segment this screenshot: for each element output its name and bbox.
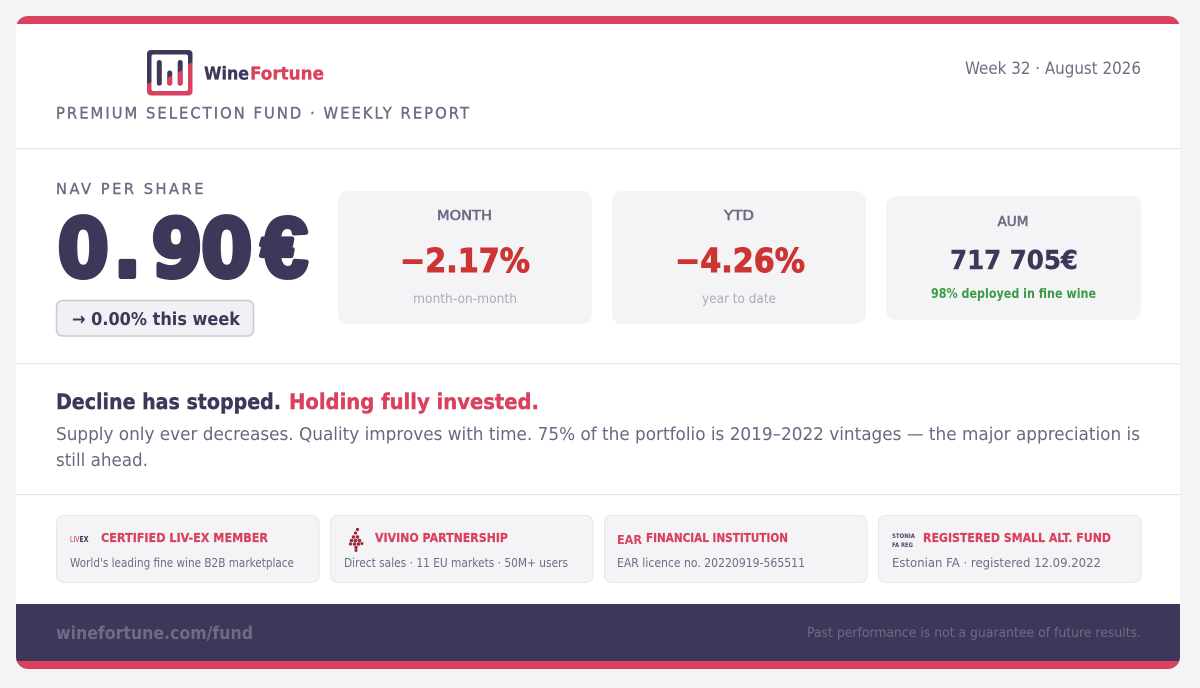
logo wordmark: Fortune (250, 64, 324, 84)
badge: Estonian FA (878, 516, 1141, 582)
badge: Liv-ex: World's leading fine wine B2B marketplace (70, 555, 294, 570)
panel: month KPI: MONTH (437, 208, 492, 224)
weekly change pill (56, 300, 254, 336)
panel: YTD KPI: year to date (702, 292, 776, 307)
badge: Liv-ex: CERTIFIED LIV-EX MEMBER (101, 530, 268, 545)
subtitle: PREMIUM SELECTION FUND · WEEKLY REPORT (56, 104, 471, 123)
badge: Vivino: Direct sales · 11 EU markets · 50M+ users (344, 555, 568, 570)
NAV label: NAV PER SHARE (56, 180, 206, 198)
footer disclaimer: Past performance is not a guarantee of future results. (807, 626, 1141, 641)
badge: Estonian FA: REGISTERED SMALL ALT. FUND (923, 530, 1111, 545)
panel: AUM KPI: AUM (998, 214, 1028, 230)
badge: Liv-ex (56, 516, 319, 582)
top accent bar (16, 16, 1180, 24)
icon: Liv-ex logo: LIVEX (70, 535, 89, 544)
icon: Estonia FA logo (892, 532, 915, 549)
commentary body (56, 424, 1140, 471)
panel: month KPI (338, 191, 592, 324)
badge: Vivino: VIVINO PARTNERSHIP (375, 530, 508, 545)
icon: Estonia FA logo: STONIA (892, 532, 915, 540)
panel: NAV per share (56, 180, 308, 336)
report date: Week 32 · August 2026 (965, 59, 1141, 78)
panel: month KPI: month-on-month (413, 292, 517, 307)
header (56, 50, 1141, 123)
weekly change pill: → 0.00% this week (72, 310, 240, 330)
footer band (16, 604, 1180, 669)
panel: AUM KPI (886, 196, 1141, 320)
commentary (56, 390, 1140, 471)
commentary body: still ahead. (56, 450, 148, 471)
panel: AUM KPI: 717 705€ (950, 246, 1078, 276)
NAV value: 0.90 (58, 204, 252, 296)
badge: EAR (604, 516, 867, 582)
NAV value: € (261, 200, 308, 294)
badge: Estonian FA: Estonian FA · registered 12.09.2022 (892, 555, 1101, 570)
panel: month KPI: −2.17% (400, 241, 530, 280)
panel: YTD KPI (612, 191, 866, 324)
commentary body: Supply only ever decreases. Quality improves with time. 75% of the portfolio is 2019–2022 vintages — the major appreciation is (56, 424, 1140, 445)
badge: EAR: EAR licence no. 20220919-565511 (617, 555, 805, 570)
panel: YTD KPI: −4.26% (675, 241, 805, 280)
panel: YTD KPI: YTD (723, 208, 754, 224)
commentary headline: Decline has stopped. (56, 390, 281, 414)
footer website: winefortune.com/fund (56, 623, 253, 644)
icon: Estonia FA logo: FA REG (892, 541, 913, 549)
panel: AUM KPI: 98% deployed in fine wine (931, 287, 1096, 302)
icon: WineFortune logo (147, 50, 193, 96)
icon: EAR logo: EAR (617, 533, 642, 547)
badge: Vivino (330, 516, 593, 582)
commentary headline: Holding fully invested. (289, 390, 539, 414)
badge: EAR: FINANCIAL INSTITUTION (646, 530, 788, 545)
logo wordmark: Wine (204, 64, 249, 84)
icon: Vivino grapes (349, 528, 364, 552)
